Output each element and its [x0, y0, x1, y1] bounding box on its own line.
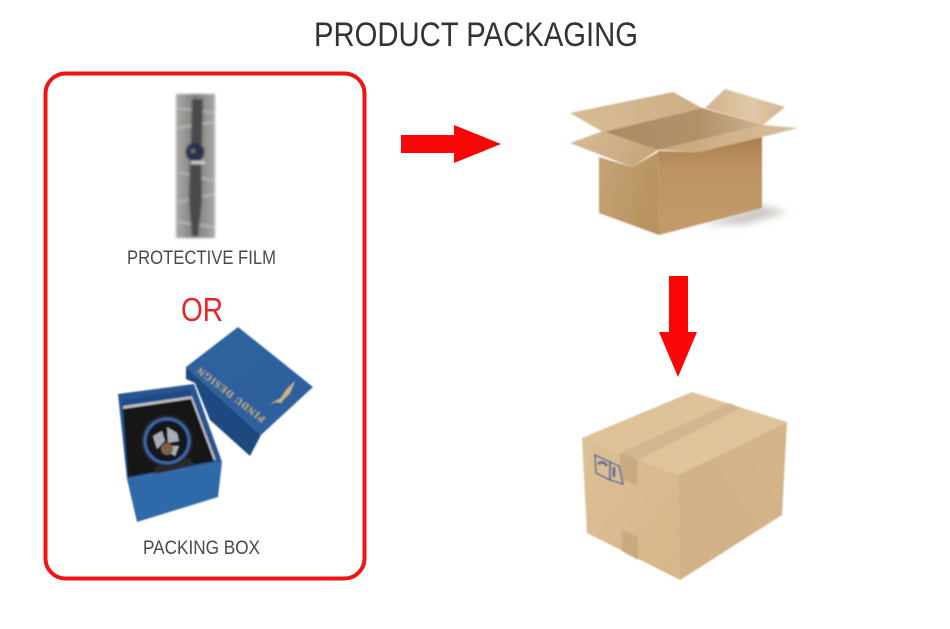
tape at bottom: [622, 530, 638, 560]
panel border: [46, 74, 364, 578]
front right flap: [658, 125, 798, 152]
arrow: right: [401, 125, 501, 163]
label: protective film: PROTECTIVE FILM: [127, 247, 276, 269]
arrow: down: [659, 276, 697, 377]
image: watch in protective film: [176, 94, 215, 238]
back left flap: [570, 92, 702, 132]
tape on top: [620, 403, 740, 460]
watch: [154, 458, 194, 474]
label: or: OR: [181, 291, 223, 328]
box shadow: [700, 206, 788, 224]
back right flap: [705, 89, 785, 125]
left face: [582, 438, 680, 580]
image: blue packing box with watch: [118, 327, 313, 522]
lid logo: [270, 381, 295, 404]
box front: [127, 462, 222, 522]
image: sealed cardboard box: [582, 392, 787, 580]
title: PRODUCT PACKAGING: [314, 16, 638, 54]
handling icons: [595, 455, 623, 484]
left face: [599, 152, 659, 235]
label: packing box: PACKING BOX: [143, 537, 260, 559]
box interior: [118, 384, 222, 479]
panel: packaging options: [46, 74, 364, 578]
image: open cardboard box: [570, 89, 798, 235]
white card edge: [123, 396, 216, 475]
top face: [582, 392, 787, 475]
box lid top: [186, 327, 313, 435]
box interior: [603, 108, 763, 150]
lid brand text: PINDU DESIGN: [195, 364, 268, 424]
tape down front: [620, 453, 638, 486]
black cushion: [123, 399, 214, 477]
box lid side: [186, 367, 261, 456]
right face: [658, 137, 762, 235]
front left flap: [570, 131, 658, 167]
right face: [678, 422, 787, 580]
